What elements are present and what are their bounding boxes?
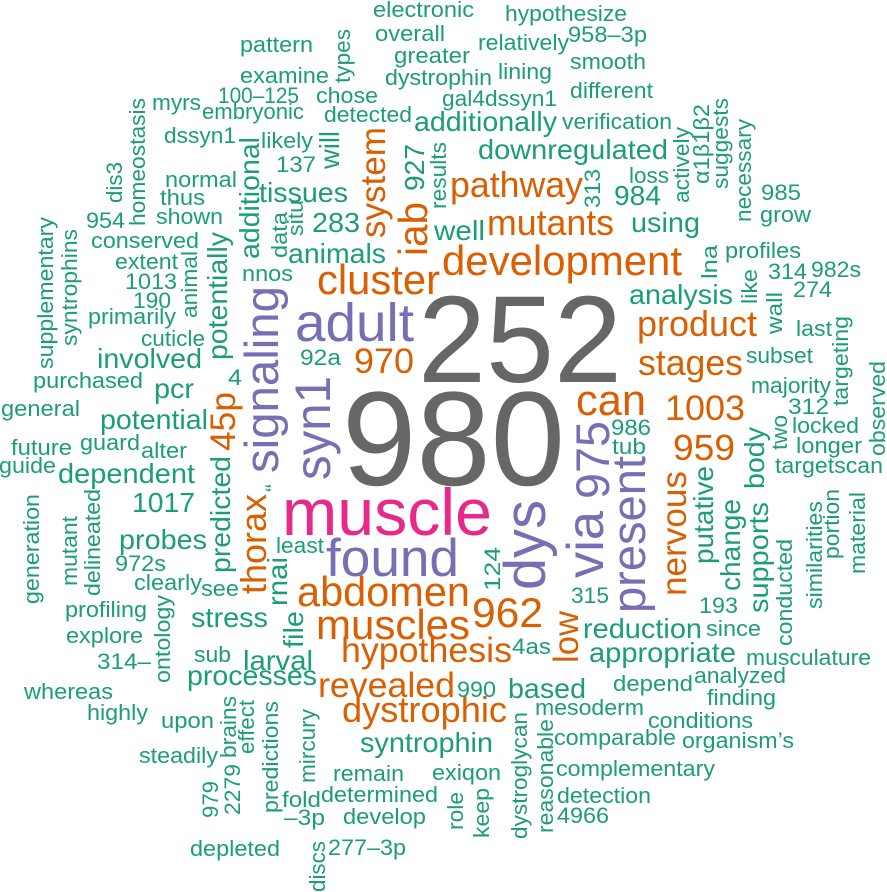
small green words: suggests — [708, 98, 733, 189]
medium green words: stress — [191, 602, 268, 633]
purple words — [235, 286, 655, 613]
small green words: 979 — [198, 781, 223, 818]
small green words: future — [11, 435, 72, 460]
word: 962: 962 — [472, 589, 543, 636]
small green words: ontology — [150, 594, 175, 683]
word: stages: stages — [638, 342, 743, 383]
medium green words: rnai — [262, 557, 293, 606]
small green words: wall — [762, 292, 787, 335]
medium green words: syntrophin — [360, 727, 493, 758]
small green words: extent — [115, 249, 179, 274]
small green words: gal4dssyn1 — [442, 86, 557, 111]
small green words: types — [330, 29, 355, 83]
medium green words: well — [433, 215, 485, 246]
medium green words: pcr — [154, 373, 194, 404]
small green words: supplementary — [33, 216, 58, 369]
small green words: 1013 — [125, 269, 177, 294]
small green words: develop — [343, 804, 426, 829]
medium green words: appropriate — [589, 637, 736, 668]
small green words: 92a — [300, 345, 342, 370]
small green words: since — [706, 616, 761, 641]
small green words: upon — [161, 708, 214, 733]
small green words: 314– — [97, 649, 152, 674]
small green words: see — [201, 576, 239, 601]
word: dystrophic: dystrophic — [342, 689, 507, 730]
word: hypothesis: hypothesis — [341, 630, 512, 670]
small green words: purchased — [33, 368, 143, 393]
word: mutants: mutants — [487, 202, 614, 243]
small green words: delineated — [80, 489, 105, 596]
small green words: mutant — [57, 515, 82, 586]
small green words: 2279 — [220, 764, 245, 815]
small green words: discs — [305, 841, 330, 892]
orange words — [204, 127, 757, 730]
small green words: keep — [469, 788, 494, 838]
small green words: smooth — [570, 49, 646, 74]
small green words: portion — [819, 489, 844, 559]
small green words: sub — [194, 642, 231, 667]
small green words: 312 — [788, 394, 829, 419]
small green words: comparable — [554, 725, 676, 750]
medium green words: 1017 — [132, 487, 195, 518]
small green words: examine — [240, 63, 329, 88]
medium green words: putative — [688, 466, 719, 564]
medium green words: involved — [97, 343, 202, 374]
small green words: role — [443, 792, 468, 830]
small green words: 985 — [761, 180, 801, 205]
word: found: found — [326, 529, 459, 588]
small green words: 313 — [580, 169, 605, 208]
small green words: material — [845, 492, 870, 574]
small green words: brains — [216, 696, 241, 758]
word: 1003: 1003 — [665, 389, 745, 428]
medium green words: based — [508, 673, 586, 704]
small green words: two — [767, 415, 792, 450]
word: present: present — [602, 456, 655, 613]
small green words: last — [796, 316, 833, 341]
medium green words — [58, 106, 774, 758]
small green words: dystrophin — [385, 65, 492, 90]
small green words: conducted — [772, 539, 797, 646]
small green words: mircury — [295, 708, 320, 783]
small green words: cuticle — [141, 326, 205, 351]
small green words: relatively — [478, 30, 570, 55]
small green words: 4as — [512, 634, 551, 659]
small green words: clearly — [134, 570, 203, 595]
word: nervous: nervous — [655, 471, 694, 596]
small green words: grow — [760, 202, 812, 227]
small green words: animal — [177, 251, 202, 318]
small green words: embryonic — [202, 99, 304, 124]
small green words: highly — [87, 700, 149, 725]
word: cluster: cluster — [317, 256, 440, 303]
word: 959: 959 — [673, 427, 735, 468]
medium green words: potentially — [202, 232, 233, 360]
medium green words: analysis — [629, 279, 733, 310]
medium green words: will — [314, 131, 345, 170]
small green words: 954 — [86, 208, 125, 233]
small green words: generation — [19, 494, 44, 604]
small green words: situ — [283, 200, 308, 236]
medium green words: tissues — [259, 177, 348, 208]
small green words: predictions — [258, 701, 283, 813]
medium green words: downregulated — [478, 134, 668, 165]
word: abdomen: abdomen — [297, 568, 470, 615]
medium green words: supports — [743, 502, 774, 613]
small green words: shown — [156, 204, 223, 229]
word: 975: 975 — [566, 421, 619, 499]
medium green words: 984 — [614, 180, 661, 211]
small green words: exiqon — [432, 760, 501, 785]
small green words: greater — [394, 43, 471, 68]
small green words: subset — [746, 343, 814, 368]
word: system: system — [354, 127, 393, 238]
word: signaling: signaling — [235, 286, 288, 473]
small green words: steadily — [139, 743, 219, 768]
small green words: 274 — [793, 277, 832, 302]
small green words: 4 — [228, 365, 242, 390]
word: low: low — [547, 610, 586, 663]
small green words: profiles — [725, 238, 801, 263]
small green words: 190 — [133, 288, 171, 313]
word: 980: 980 — [342, 365, 565, 514]
small green words: data — [267, 211, 292, 258]
medium green words: reduction — [583, 613, 702, 644]
medium green words: change — [715, 499, 746, 591]
small green words: determined — [321, 782, 438, 807]
small green words: hypothesize — [505, 1, 627, 26]
medium green words: 927 — [399, 144, 430, 191]
small green words: complementary — [556, 756, 716, 781]
small green words: profiling — [65, 597, 147, 622]
small green words: primarily — [88, 304, 177, 329]
small green words: mesoderm — [535, 695, 644, 720]
small green words: analyzed — [694, 663, 786, 688]
small green words: similarities — [802, 501, 827, 609]
small green words: reasonable — [533, 719, 558, 833]
small green words: like — [737, 269, 762, 304]
small green words: pattern — [240, 32, 313, 57]
small green words: effect — [234, 699, 259, 754]
small green words: alter — [141, 438, 188, 463]
medium green words: dependent — [58, 458, 195, 489]
small green words: conditions — [648, 708, 753, 733]
word: product: product — [637, 303, 757, 344]
small green words: myrs — [152, 90, 201, 115]
small green words: targetscan — [775, 453, 883, 478]
small green words: nnos — [242, 261, 293, 286]
small green words: homeostasis — [125, 98, 150, 226]
medium green words: probes — [119, 524, 207, 555]
small green words: thus — [160, 185, 205, 210]
word: thorax: thorax — [233, 494, 274, 594]
small green words: depleted — [190, 836, 280, 861]
small green words: dystroglycan — [507, 712, 532, 839]
small green words: whereas — [23, 679, 113, 704]
small green words: results — [426, 142, 451, 209]
small green words: 972s — [115, 551, 166, 576]
small green words: 982s — [811, 257, 861, 282]
small green words: α1β1β2 — [689, 104, 714, 184]
medium green words: 283 — [312, 207, 360, 238]
medium green words: using — [631, 207, 700, 238]
small green words: “ — [261, 484, 286, 492]
small green words: 137 — [276, 152, 316, 177]
small green words: remain — [333, 761, 404, 786]
medium green words: body — [739, 427, 770, 489]
small green words: conserved — [91, 228, 199, 253]
small green words: 277–3p — [328, 835, 406, 860]
medium green words: potential — [100, 404, 208, 435]
small green words: dssyn1 — [164, 123, 236, 148]
small green words: lna — [697, 244, 722, 279]
word: revealed: revealed — [318, 665, 455, 705]
small green words: –3p — [284, 805, 325, 830]
word: muscle: muscle — [282, 475, 492, 549]
word: 252: 252 — [418, 272, 622, 409]
small green words: targeting — [828, 316, 853, 406]
small green words: fold — [282, 787, 321, 812]
medium green words: predicted — [205, 456, 236, 573]
word: adult: adult — [295, 293, 414, 353]
small green words: longer — [796, 433, 863, 458]
small green words: general — [1, 396, 80, 421]
small green words: explore — [66, 623, 143, 648]
small green words: depend — [613, 671, 693, 696]
medium green words: animals — [288, 238, 386, 269]
small green words: detection — [557, 783, 651, 808]
small green words: necessary — [731, 118, 756, 222]
small green words: organism’s — [682, 728, 794, 753]
small green words: majority — [751, 373, 832, 398]
small green words: different — [570, 78, 654, 103]
word: development: development — [442, 237, 682, 284]
small green words: finding — [707, 685, 776, 710]
word: dys: dys — [493, 500, 558, 590]
medium green words: additionally — [414, 106, 557, 137]
small green words: least — [276, 533, 325, 558]
word: muscles: muscles — [316, 601, 470, 648]
small green words: 4966 — [557, 803, 609, 828]
small green words: 100–125 — [218, 83, 299, 108]
small green words: guard — [80, 430, 140, 455]
small green words: loss — [629, 163, 669, 188]
medium green words: additional — [234, 137, 265, 259]
small green words: tub — [612, 434, 646, 459]
small green words: 990 — [457, 677, 496, 702]
word: iab: iab — [390, 202, 436, 256]
small green words: 193 — [699, 593, 738, 618]
small green words: 314 — [768, 259, 807, 284]
word: via: via — [557, 511, 615, 578]
small green words: 124 — [480, 547, 505, 591]
small green words: 986 — [611, 415, 651, 440]
small green words: verification — [562, 109, 672, 134]
word: can: can — [576, 376, 646, 425]
small green words: syntrophins — [57, 229, 82, 346]
small green words: likely — [261, 128, 314, 153]
small green words: 315 — [571, 583, 609, 608]
small green words: locked — [792, 413, 859, 438]
small green words: actively — [669, 126, 694, 203]
word: 970: 970 — [354, 342, 414, 381]
medium green words: file — [278, 611, 309, 648]
word: 45p: 45p — [204, 392, 243, 451]
small green words: overall — [375, 21, 445, 46]
small green words: normal — [165, 167, 237, 192]
small green words: musculature — [746, 645, 871, 670]
small green words: guide — [0, 453, 56, 478]
small green words: lining — [498, 59, 552, 84]
word: syn1: syn1 — [285, 376, 341, 480]
small green words: chose — [316, 83, 378, 108]
small green words: dis3 — [102, 162, 127, 203]
word: pathway: pathway — [450, 164, 583, 205]
small green words: detected — [324, 102, 412, 127]
medium green words: processes — [187, 660, 317, 691]
small green words: 958–3p — [568, 22, 647, 47]
medium green words: larval — [243, 645, 313, 676]
